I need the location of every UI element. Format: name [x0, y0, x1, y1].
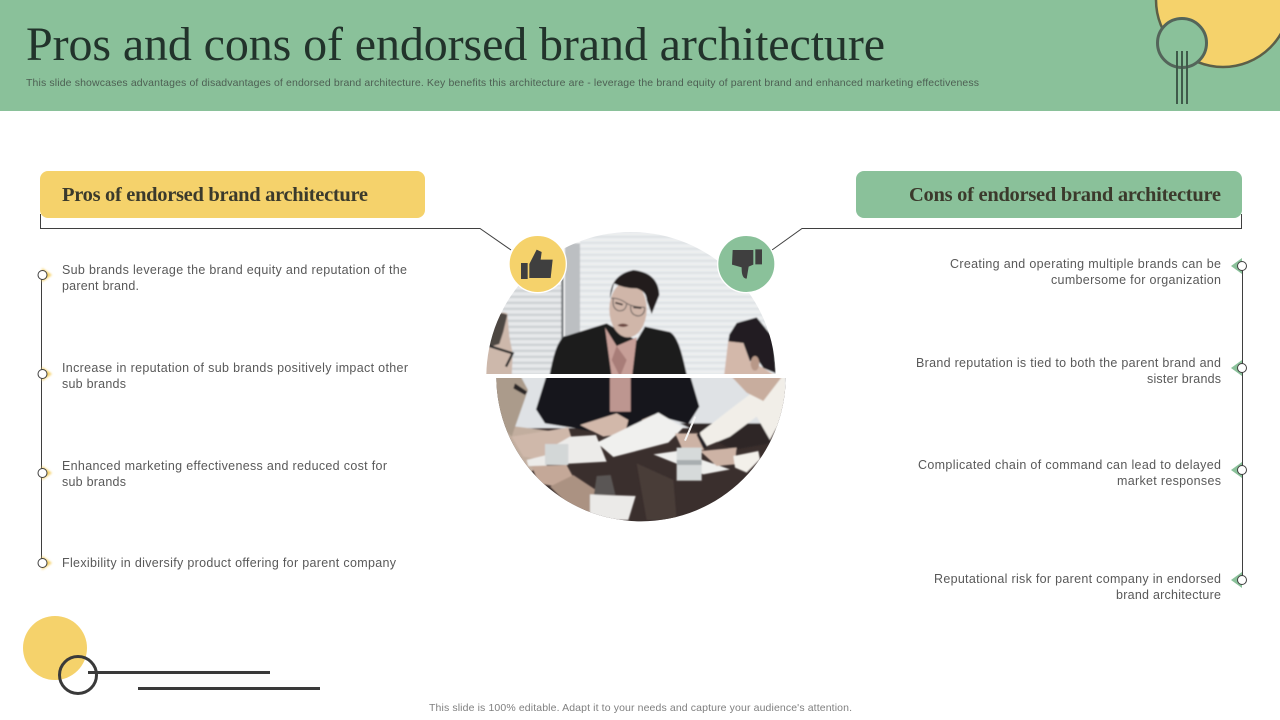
papers left — [558, 434, 608, 465]
pro item 1 — [62, 263, 407, 293]
jacket — [549, 323, 687, 377]
con item 3: market responses — [1117, 474, 1221, 488]
con item 1: Creating and operating multiple brands can be — [950, 257, 1221, 271]
pro item 1: Sub brands leverage the brand equity and reputation of the — [62, 263, 407, 277]
pros heading: Pros of endorsed brand architecture — [62, 184, 368, 206]
con item 3 — [918, 458, 1221, 488]
pro item 2: sub brands — [62, 377, 126, 391]
pro item 3: Enhanced marketing effectiveness and reduced cost for — [62, 459, 387, 473]
header band — [0, 0, 1280, 111]
pro item 2: Increase in reputation of sub brands positively impact other — [62, 361, 408, 375]
title: Pros and cons of endorsed brand architecture — [26, 18, 885, 71]
bottom-left decoration — [23, 616, 320, 694]
pro item 1: parent brand. — [62, 279, 139, 293]
glass — [677, 448, 702, 481]
header decoration: circles and lines — [1156, 0, 1280, 104]
panel: pros — [38, 171, 511, 570]
panel: cons — [772, 171, 1246, 602]
footer note: This slide is 100% editable. Adapt it to your needs and capture your audience's attention. — [429, 702, 852, 714]
pros timeline — [38, 268, 52, 570]
con item 1 — [950, 257, 1221, 287]
cons heading: Cons of endorsed brand architecture — [909, 184, 1221, 206]
photo lower half — [496, 378, 786, 522]
central photo: business meeting split circle — [486, 232, 786, 522]
icon: thumbs down — [718, 235, 775, 293]
center paper — [597, 413, 683, 457]
shirt — [605, 327, 637, 377]
bottom left hands — [532, 465, 574, 486]
head — [609, 281, 647, 337]
pros heading — [40, 171, 425, 218]
pro item 4: Flexibility in diversify product offering for parent company — [62, 556, 397, 570]
con item 4: Reputational risk for parent company in endorsed — [934, 572, 1221, 586]
right paper — [653, 451, 730, 474]
con item 2: Brand reputation is tied to both the parent brand and — [916, 356, 1221, 370]
cons connector line — [772, 214, 1242, 250]
left person arm — [496, 378, 528, 436]
con item 4 — [934, 572, 1221, 602]
subtitle: This slide showcases advantages of disadvantages of endorsed brand architecture. Key benefits this architecture are - leverage the brand equity of parent brand and enhanced marketing effectiveness — [26, 77, 979, 89]
cons heading — [856, 171, 1242, 218]
photo upper half — [486, 232, 776, 374]
con item 3: Complicated chain of command can lead to delayed — [918, 458, 1221, 472]
icon: thumbs up — [509, 235, 566, 293]
con item 2: sister brands — [1147, 372, 1221, 386]
person right — [724, 340, 774, 374]
pro item 3 — [62, 459, 387, 489]
con item 2 — [916, 356, 1221, 386]
person left — [486, 312, 513, 374]
pros connector line — [40, 214, 511, 250]
jacket lower — [536, 375, 699, 435]
pro item 2 — [62, 361, 408, 391]
pro item 3: sub brands — [62, 475, 126, 489]
con item 4: brand architecture — [1116, 588, 1221, 602]
right person — [700, 375, 787, 448]
con item 1: cumbersome for organization — [1051, 273, 1221, 287]
cons timeline — [1231, 258, 1246, 588]
